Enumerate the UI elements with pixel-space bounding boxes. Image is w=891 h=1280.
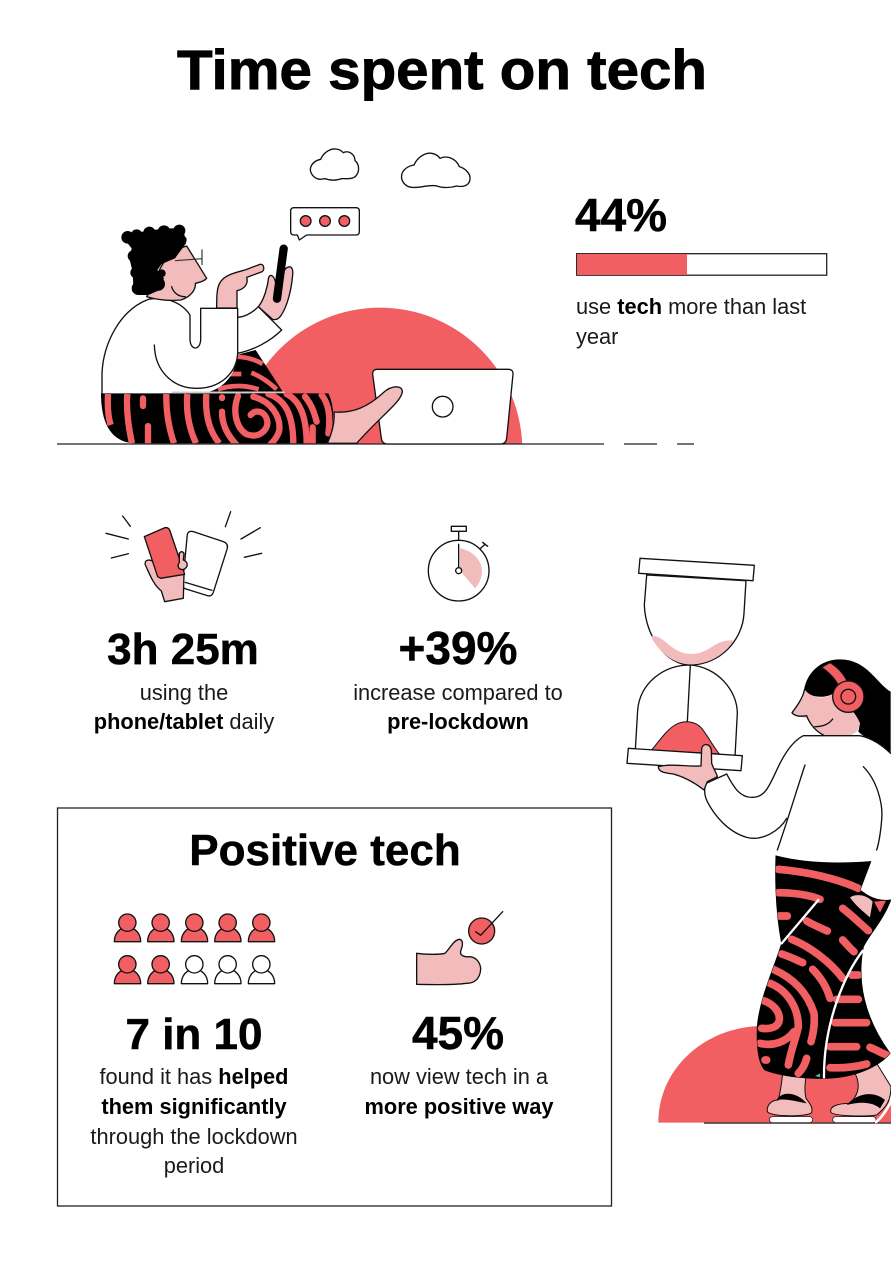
illustration: woman with hourglass <box>627 558 891 1123</box>
upper body <box>627 558 891 850</box>
ground line <box>704 1120 891 1125</box>
stat: increase: pre-lockdown <box>387 709 529 734</box>
title: Time spent on tech <box>177 38 707 101</box>
panel: positive tech <box>58 808 612 1206</box>
stat number: +39% <box>399 622 517 674</box>
phone <box>277 249 284 299</box>
upper sand <box>651 636 734 664</box>
icon: ten people <box>114 914 275 984</box>
bottom plate <box>627 748 742 771</box>
left leg and sandal <box>767 1073 813 1123</box>
falling sand line <box>687 665 690 722</box>
stat caption: use tech more than last <box>576 294 806 319</box>
pointing hand <box>217 264 264 308</box>
stat: increase <box>353 526 563 734</box>
icon: hand holding phones <box>106 512 262 602</box>
panel: positive tech: through the lockdown <box>90 1124 298 1149</box>
patterned trousers <box>101 392 333 445</box>
hourglass <box>627 558 754 771</box>
icon: stopwatch <box>428 526 489 601</box>
stat: 44 percent <box>575 189 827 349</box>
stat caption: increase compared to <box>353 680 563 705</box>
hair <box>804 659 891 753</box>
torso <box>102 298 238 393</box>
face <box>792 690 860 735</box>
upper glass <box>644 575 746 665</box>
panel: positive tech: more positive way <box>365 1094 553 1119</box>
stat number: 3h 25m <box>107 625 259 674</box>
panel border <box>58 808 612 1206</box>
hair <box>121 225 187 295</box>
stat caption: now view tech in a <box>370 1064 549 1089</box>
lower glass <box>635 665 737 757</box>
illustration: man with phone and laptop <box>57 148 694 445</box>
headphones <box>822 663 864 712</box>
cloud right <box>402 153 470 188</box>
head <box>147 246 207 300</box>
sun <box>658 1026 891 1123</box>
stat number: 44% <box>575 189 667 241</box>
top plate <box>639 558 754 581</box>
lower sand <box>652 722 719 754</box>
cloud left <box>310 149 359 180</box>
torso and arm <box>705 736 891 850</box>
foot <box>327 387 402 443</box>
patterned skirt <box>757 856 891 1078</box>
sun <box>238 308 522 444</box>
icon: thumbs up with tick <box>417 912 503 985</box>
stat: phone use <box>94 512 274 734</box>
right leg and sandal <box>831 1063 891 1123</box>
stat: 44 percent: year <box>576 324 618 349</box>
panel heading: Positive tech <box>189 826 461 875</box>
smile <box>172 287 185 297</box>
panel: positive tech: them significantly <box>101 1094 287 1119</box>
hand <box>658 744 717 790</box>
lower body <box>658 856 891 1123</box>
glasses <box>175 249 202 265</box>
stat caption: found it has helped <box>99 1064 289 1089</box>
stat: phone use: phone/tablet daily <box>94 709 274 734</box>
laptop <box>373 369 513 444</box>
raised thigh <box>210 350 282 392</box>
ground line <box>57 442 694 446</box>
hand holding phone <box>258 267 293 320</box>
sleeve <box>238 307 282 353</box>
stat number: 45% <box>412 1007 504 1059</box>
speech bubble <box>291 208 359 240</box>
panel: positive tech: period <box>164 1153 224 1178</box>
stat caption: using the <box>140 680 228 705</box>
progress bar <box>577 254 827 275</box>
stat number: 7 in 10 <box>126 1010 262 1059</box>
